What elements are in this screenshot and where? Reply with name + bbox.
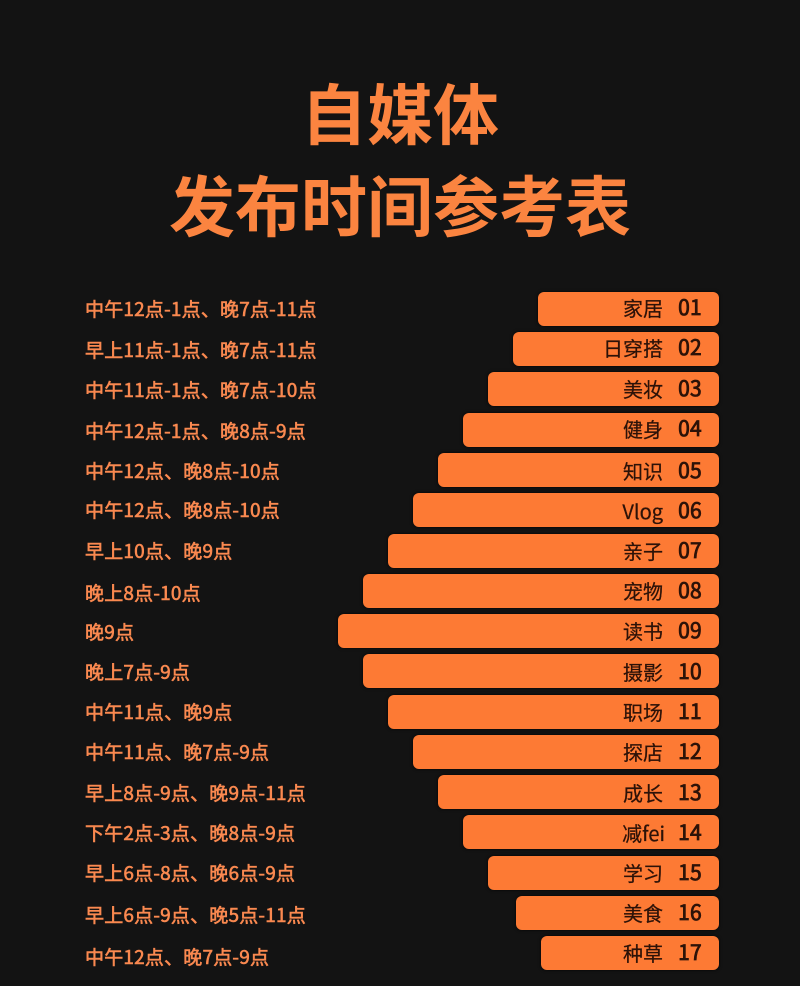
row 10 摄影 (85, 654, 719, 688)
row 13 成长: 13 (678, 777, 702, 807)
row 05 知识 (85, 453, 719, 487)
row 01 家居 (85, 292, 719, 326)
row 14 减fei: 14 (678, 817, 702, 847)
row 01 家居: 01 (678, 292, 702, 322)
row 07 亲子 (85, 534, 719, 568)
row 01 家居: 中午12点-1点、晚7点-11点 (85, 295, 317, 322)
row 04 健身: 中午12点-1点、晚8点-9点 (85, 417, 306, 444)
row 17 种草: 17 (678, 937, 702, 967)
title line 2: 发布时间参考表 (169, 155, 631, 251)
row 13 成长: 成长 (623, 778, 663, 807)
row 09 读书: 09 (678, 615, 702, 645)
row 06 Vlog: 中午12点、晚8点-10点 (85, 496, 280, 523)
row 15 学习 (85, 856, 719, 890)
row 07 亲子: 早上10点、晚9点 (85, 537, 232, 564)
row 09 读书: 晚9点 (85, 618, 134, 645)
row 12 探店: 中午11点、晚7点-9点 (85, 738, 269, 765)
row 16 美食 (85, 896, 719, 930)
row 06 Vlog: 06 (678, 495, 702, 525)
row 08 宠物 (85, 574, 719, 608)
row 16 美食: 美食 (623, 898, 663, 927)
row 02 日穿搭: 早上11点-1点、晚7点-11点 (85, 336, 317, 363)
row 16 美食: 16 (678, 897, 702, 927)
row 09 读书 (85, 614, 719, 648)
row 11 职场: 职场 (623, 697, 663, 726)
row 03 美妆: 美妆 (623, 374, 663, 403)
row 12 探店: 12 (678, 736, 702, 766)
row 11 职场: 中午11点、晚9点 (85, 698, 232, 725)
row 10 摄影: 晚上7点-9点 (85, 658, 190, 685)
row 01 家居: 家居 (623, 293, 663, 322)
row 04 健身: 04 (678, 413, 702, 443)
row 12 探店 (85, 735, 719, 769)
row 06 Vlog: Vlog (622, 496, 663, 525)
row 02 日穿搭 (85, 332, 719, 366)
row 05 知识: 知识 (623, 456, 663, 485)
row 17 种草: 中午12点、晚7点-9点 (85, 943, 269, 970)
row 17 种草: 种草 (623, 938, 663, 967)
row 10 摄影: 10 (678, 656, 702, 686)
row 08 宠物: 晚上8点-10点 (85, 579, 201, 606)
row 02 日穿搭: 日穿搭 (603, 333, 663, 362)
row 14 减fei: 减fei (622, 818, 665, 847)
row 15 学习: 早上6点-8点、晚6点-9点 (85, 859, 295, 886)
row 11 职场: 11 (678, 696, 702, 726)
row 16 美食: 早上6点-9点、晚5点-11点 (85, 901, 306, 928)
row 13 成长 (85, 775, 719, 809)
row 15 学习: 学习 (623, 858, 663, 887)
row 13 成长: 早上8点-9点、晚9点-11点 (85, 779, 306, 806)
row 03 美妆: 03 (678, 373, 702, 403)
row 15 学习: 15 (678, 857, 702, 887)
row 07 亲子: 亲子 (623, 536, 663, 565)
row 04 健身 (85, 413, 719, 447)
row 10 摄影: 摄影 (623, 657, 663, 686)
row 03 美妆 (85, 372, 719, 406)
row 14 减fei: 下午2点-3点、晚8点-9点 (85, 819, 295, 846)
row 05 知识: 05 (678, 455, 702, 485)
row 11 职场 (85, 695, 719, 729)
row 04 健身: 健身 (623, 414, 663, 443)
row 12 探店: 探店 (623, 737, 663, 766)
row 17 种草 (85, 936, 719, 970)
row 14 减fei (85, 815, 719, 849)
row 05 知识: 中午12点、晚8点-10点 (85, 457, 280, 484)
row 08 宠物: 宠物 (623, 576, 663, 605)
row 09 读书: 读书 (623, 616, 663, 645)
row 06 Vlog (85, 493, 719, 527)
title line 1: 自媒体 (301, 63, 499, 159)
row 02 日穿搭: 02 (678, 332, 702, 362)
row 07 亲子: 07 (678, 535, 702, 565)
row 03 美妆: 中午11点-1点、晚7点-10点 (85, 376, 317, 403)
row 08 宠物: 08 (678, 575, 702, 605)
